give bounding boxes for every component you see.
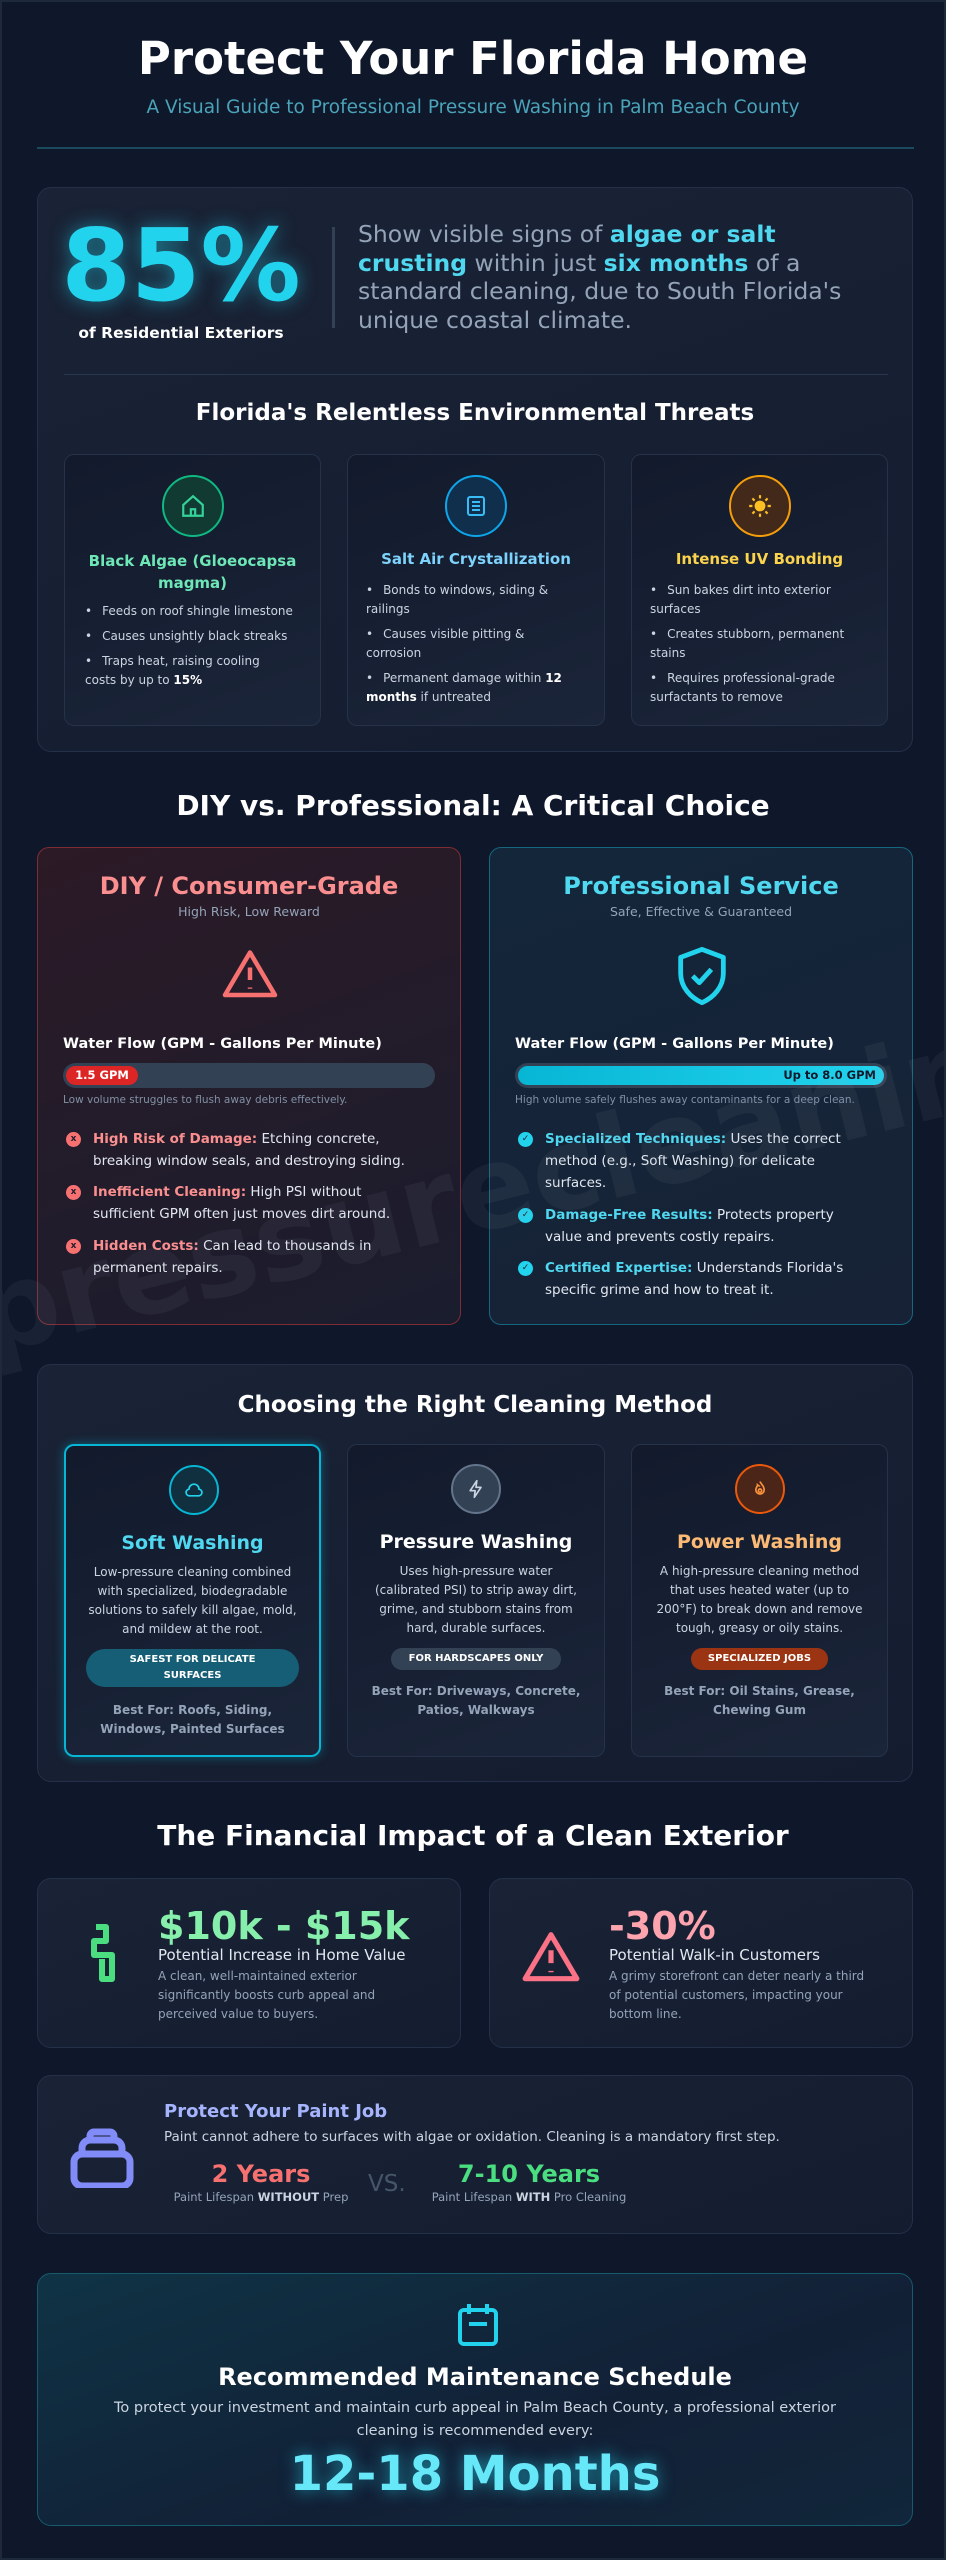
panel: Professional: Specialized Techniques: Uses the correct method (e.g., Soft Washing) for delicate surfaces. <box>545 1131 841 1191</box>
card: power washing <box>631 1444 888 1757</box>
panel: paint job: VS. <box>368 2171 406 2197</box>
badge <box>391 1648 561 1670</box>
panel: DIY <box>37 847 461 1325</box>
stat: 2 years <box>174 2160 348 2204</box>
panel: maintenance schedule: To protect your investment and maintain curb appeal in Palm Beach County, a professional exterior <box>114 2400 836 2416</box>
card: power washing: Power Washing <box>677 1531 842 1553</box>
panel: Professional <box>489 847 913 1325</box>
bullets: pro benefits <box>518 1131 843 1298</box>
card: black algae: Traps heat, raising cooling <box>102 654 260 668</box>
stat: 7-10 years: 7-10 Years <box>458 2160 600 2188</box>
title: Protect Your Florida Home <box>138 32 808 85</box>
card: power washing: A high-pressure cleaning method that uses heated water (up to 200°F) to break down and remove tough, greasy or oily stains. <box>656 1564 863 1635</box>
panel: Professional: Certified Expertise: Understands Florida's specific grime and how to treat it. <box>545 1260 843 1298</box>
badge <box>691 1648 828 1670</box>
panel: DIY: Low volume struggles to flush away debris effectively. <box>63 1094 347 1106</box>
card: pressure washing: Best For: Driveways, Concrete, Patios, Walkways <box>372 1684 580 1717</box>
card: home value <box>37 1878 461 2048</box>
panel: key stat and threats <box>37 187 913 752</box>
panel: Professional: High volume safely flushes away contaminants for a deep clean. <box>515 1094 855 1106</box>
icon: warning <box>522 1932 580 1982</box>
panel: Professional: Damage-Free Results: Protects property value and prevents costly repairs. <box>545 1207 834 1245</box>
bullets: DIY risks <box>66 1131 405 1276</box>
card: walk-in customers <box>489 1878 913 2048</box>
bar: 1.5 GPM: 1.5 GPM <box>75 1068 129 1082</box>
icon: paint bucket <box>70 2128 134 2188</box>
card: UV: Requires professional-grade surfactants to remove <box>650 671 835 704</box>
card: soft washing <box>64 1444 321 1757</box>
icon: flame <box>735 1464 785 1514</box>
icon: grid <box>445 475 507 537</box>
panel: DIY: x <box>71 1134 76 1144</box>
stat: 2 years: Paint Lifespan WITHOUT Prep <box>174 2190 348 2204</box>
panel: paint job <box>37 2075 913 2234</box>
card: salt air <box>347 454 605 726</box>
panel: cleaning methods <box>37 1364 913 1782</box>
bar: 8.0 GPM: Up to 8.0 GPM <box>783 1068 876 1082</box>
stat: 85%: of Residential Exteriors <box>78 324 284 342</box>
card: black algae: Causes unsightly black streaks <box>102 629 287 643</box>
panel: paint job: Protect Your Paint Job <box>164 2101 387 2122</box>
subtitle: A Visual Guide to Professional Pressure Washing in Palm Beach County <box>146 97 800 118</box>
card: walk-in customers: -30% <box>609 1904 716 1948</box>
stat: 85%: 85% <box>61 207 301 324</box>
panel: DIY: High Risk, Low Reward <box>178 904 320 919</box>
card: UV <box>631 454 888 726</box>
panel: Professional: Professional Service <box>563 872 839 900</box>
card: black algae <box>64 454 321 726</box>
card: UV: Sun bakes dirt into exterior surfaces <box>650 583 831 616</box>
panel: maintenance schedule: Recommended Maintenance Schedule <box>218 2363 732 2391</box>
card: pressure washing: Pressure Washing <box>380 1531 572 1553</box>
card: UV: Intense UV Bonding <box>676 550 843 568</box>
card: soft washing: Best For: Roofs, Siding, Windows, Painted Surfaces <box>100 1703 285 1736</box>
stat: 7-10 years: Paint Lifespan WITH Pro Cleaning <box>432 2190 626 2204</box>
card: pressure washing <box>347 1444 605 1757</box>
bar: 1.5 GPM <box>63 1063 435 1088</box>
card: power washing: Best For: Oil Stains, Grease, Chewing Gum <box>664 1684 855 1717</box>
stat description: Show visible signs of algae or salt crusting within just six months of a standard cleaning, due to South Florida's unique coastal climate. <box>358 220 841 334</box>
panel: DIY: Hidden Costs: Can lead to thousands in permanent repairs. <box>93 1238 371 1276</box>
panel: DIY: Inefficient Cleaning: High PSI without sufficient GPM often just moves dirt around. <box>93 1184 390 1222</box>
heading: DIY vs Pro: DIY vs. Professional: A Critical Choice <box>176 789 770 822</box>
heading: threats: Florida's Relentless Environmental Threats <box>196 400 754 426</box>
panel: Professional: ✓ <box>522 1210 529 1220</box>
badge: SAFEST FOR DELICATE SURFACES <box>130 1654 255 1681</box>
panel: DIY: DIY / Consumer-Grade <box>100 872 398 900</box>
panel: maintenance schedule: 12-18 Months <box>290 2446 660 2502</box>
card: pressure washing: Uses high-pressure water (calibrated PSI) to strip away dirt, grime, and stubborn stains from hard, durable surfaces. <box>375 1564 577 1635</box>
card: black algae: costs by up to 15% <box>85 673 202 687</box>
icon: money <box>91 1924 115 1982</box>
icon: calendar <box>458 2304 498 2346</box>
heading: financial impact: The Financial Impact of a Clean Exterior <box>157 1819 789 1852</box>
panel: DIY: x <box>71 1187 76 1197</box>
badge <box>86 1649 299 1687</box>
icon: bolt <box>451 1464 501 1514</box>
card: home value: $10k - $15k <box>158 1904 409 1948</box>
badge: FOR HARDSCAPES ONLY <box>409 1653 543 1664</box>
card: black algae: Black Algae (Gloeocapsa magma) <box>89 552 296 592</box>
card: home value: A clean, well-maintained exterior significantly boosts curb appeal and perceived value to buyers. <box>158 1969 375 2021</box>
panel: Professional: ✓ <box>522 1134 529 1144</box>
icon: warning <box>222 950 278 998</box>
card: salt air: Bonds to windows, siding & railings <box>366 583 548 616</box>
card: salt air: Salt Air Crystallization <box>381 550 571 568</box>
icon: shield <box>678 946 726 1006</box>
stat: 7-10 years <box>432 2160 626 2204</box>
panel: DIY: Water Flow (GPM - Gallons Per Minute) <box>63 1036 382 1052</box>
panel: maintenance schedule: cleaning is recommended every: <box>357 2423 593 2439</box>
panel: Professional: Water Flow (GPM - Gallons Per Minute) <box>515 1036 834 1052</box>
card: walk-in customers: A grimy storefront can deter nearly a third of potential customers, impacting your bottom line. <box>609 1969 864 2021</box>
panel: Professional: Safe, Effective & Guaranteed <box>610 904 792 919</box>
icon: sun <box>729 475 791 537</box>
panel: paint job: Paint cannot adhere to surfaces with algae or oxidation. Cleaning is a mandatory first step. <box>164 2129 780 2145</box>
card: soft washing: Soft Washing <box>121 1532 264 1554</box>
card: home value: Potential Increase in Home Value <box>158 1946 405 1964</box>
card: UV: Creates stubborn, permanent stains <box>650 627 844 660</box>
icon: house <box>162 475 224 537</box>
badge: SPECIALIZED JOBS <box>708 1653 811 1664</box>
card: soft washing: Low-pressure cleaning combined with specialized, biodegradable solutions to safely kill algae, mold, and mildew at the root. <box>88 1565 297 1636</box>
heading: methods: Choosing the Right Cleaning Method <box>238 1392 712 1418</box>
panel: DIY: x <box>71 1241 76 1251</box>
panel: DIY: High Risk of Damage: Etching concrete, breaking window seals, and destroying siding. <box>93 1131 405 1169</box>
stat: 2 years: 2 Years <box>212 2160 310 2188</box>
card: black algae: Feeds on roof shingle limestone <box>102 604 293 618</box>
panel: Professional: ✓ <box>522 1263 529 1273</box>
bar: 8.0 GPM <box>515 1063 887 1088</box>
card: walk-in customers: Potential Walk-in Customers <box>609 1946 820 1964</box>
card: salt air: Permanent damage within 12 months if untreated <box>366 671 562 704</box>
icon: droplet <box>169 1465 219 1515</box>
card: salt air: Causes visible pitting & corrosion <box>366 627 524 660</box>
panel: maintenance schedule <box>37 2273 913 2526</box>
